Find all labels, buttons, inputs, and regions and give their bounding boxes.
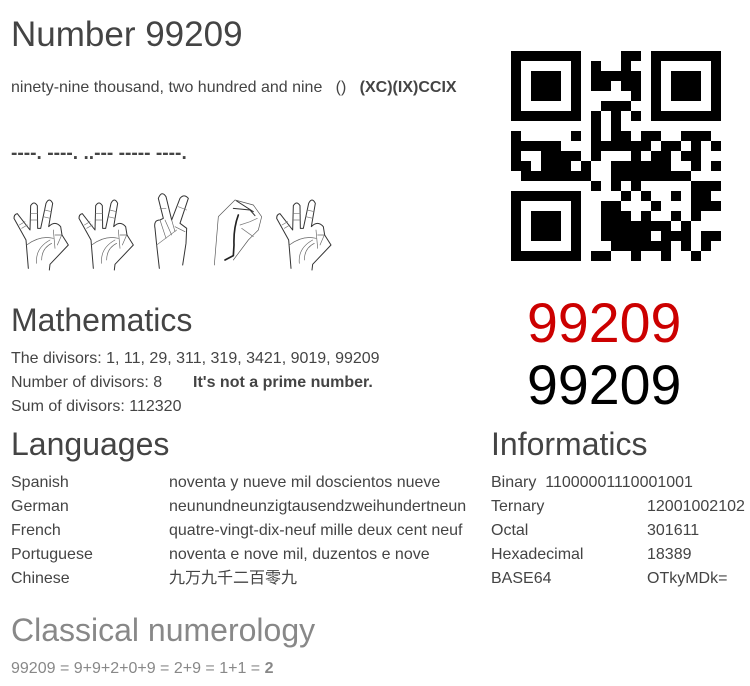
languages table: German: [11, 498, 69, 515]
languages table: 九万九千二百零九: [169, 570, 297, 587]
heading: informatics: Informatics: [491, 426, 647, 462]
informatics table: Binary 11000001110001001: [491, 474, 693, 491]
hand: nine: [14, 200, 68, 270]
informatics table: [491, 474, 745, 587]
informatics table: 18389: [647, 546, 692, 563]
informatics table: OTkyMDk=: [647, 570, 727, 587]
languages table: noventa e nove mil, duzentos e nove: [169, 546, 430, 563]
hand: nine: [277, 200, 331, 270]
black number: 99209: [527, 354, 681, 416]
title: Number 99209: [11, 15, 243, 54]
informatics table: Ternary: [491, 498, 544, 515]
languages table: neunundneunzigtausendzweihundertneun: [169, 498, 466, 515]
heading: mathematics: Mathematics: [11, 302, 192, 338]
morse code: ----. ----. ..--- ----- ----.: [11, 143, 187, 164]
sum of divisors: Sum of divisors: 112320: [11, 398, 181, 415]
divisors list: The divisors: 1, 11, 29, 311, 319, 3421, 9019, 99209: [11, 350, 380, 367]
heading: languages: Languages: [11, 426, 169, 462]
languages table: Spanish: [11, 474, 69, 491]
informatics table: Octal: [491, 522, 528, 539]
red number: 99209: [527, 292, 681, 354]
hand: two: [155, 194, 188, 268]
hand: zero: [214, 200, 262, 265]
numerology calculation: 99209 = 9+9+2+0+9 = 2+9 = 1+1 = 2: [11, 660, 273, 677]
hand: nine: [79, 200, 133, 270]
number in words and roman numerals: ninety-nine thousand, two hundred and nine () (XC)(IX)CCIX: [11, 79, 457, 96]
languages table: Chinese: [11, 570, 70, 587]
informatics table: 12001002102: [647, 498, 745, 515]
informatics table: 301611: [647, 522, 699, 539]
informatics table: BASE64: [491, 570, 551, 587]
languages table: noventa y nueve mil doscientos nueve: [169, 474, 440, 491]
languages table: quatre-vingt-dix-neuf mille deux cent neuf: [169, 522, 462, 539]
prime status: It's not a prime number.: [193, 374, 373, 391]
heading: classical numerology: Classical numerology: [11, 612, 315, 648]
QR code: [511, 51, 721, 261]
informatics table: Hexadecimal: [491, 546, 583, 563]
languages table: Portuguese: [11, 546, 93, 563]
number of divisors: Number of divisors: 8: [11, 374, 162, 391]
languages table: French: [11, 522, 61, 539]
sign language hands: [14, 193, 332, 270]
languages table: [11, 474, 466, 587]
